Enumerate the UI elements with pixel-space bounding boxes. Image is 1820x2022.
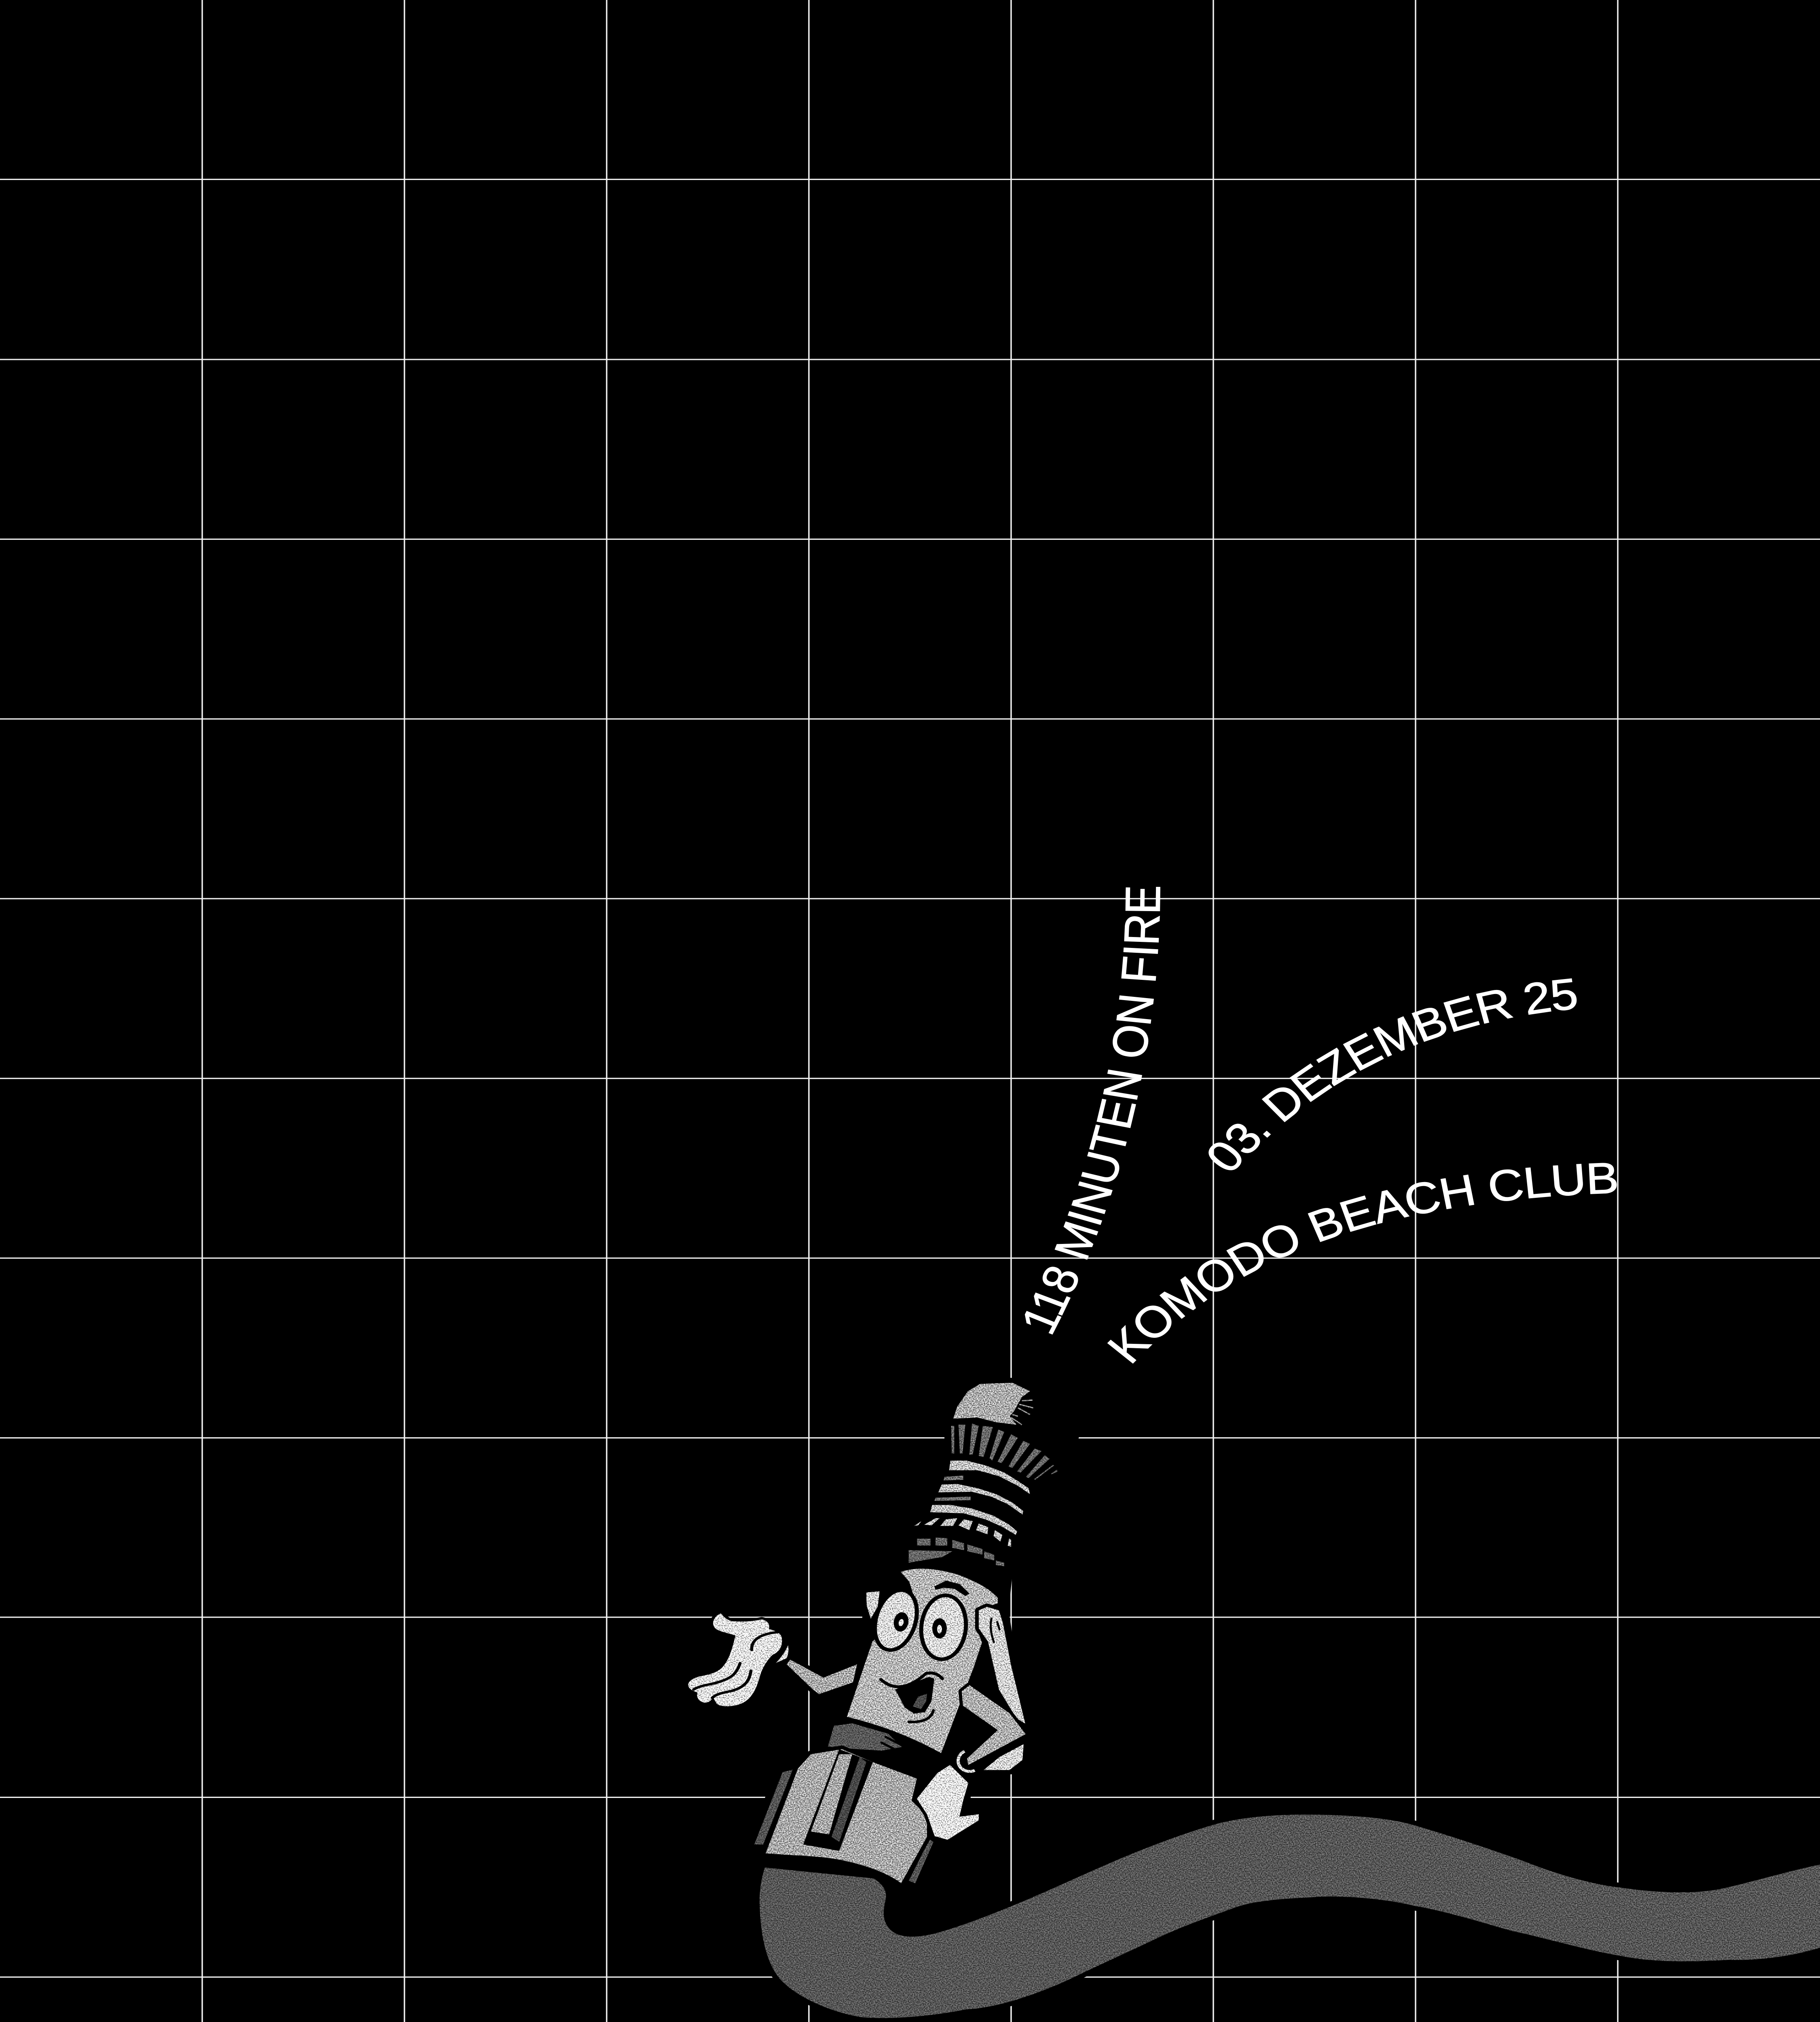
neck bands [930,1461,1030,1535]
right arm on hip [962,1685,1026,1765]
tongue [913,1694,927,1709]
dome highlight [953,1383,1030,1425]
neck band shadows [934,1476,971,1501]
smile line [881,1673,942,1687]
curved text: venue: KOMODO BEACH CLUB [1098,1154,1620,1372]
slot dark bar [832,1757,866,1842]
nozzle head dome [953,1383,1033,1425]
slot light bar [811,1754,852,1834]
ring [958,1751,975,1771]
nozzle ribs [951,1423,1058,1480]
left ear [866,1591,880,1619]
mascot: fire hose nozzle character [688,1378,1820,2018]
belt collar [828,1723,938,1778]
cuff [776,1645,789,1663]
slot frame [803,1749,873,1851]
right side strip [909,1839,933,1883]
left eye [871,1588,921,1652]
belt creases [882,1737,904,1751]
left side strip [754,1770,793,1844]
coupling body [766,1749,927,1883]
finger lines [694,1632,780,1698]
hose [760,1815,1820,2018]
collar upper studs [914,1518,1011,1547]
eyebrow [934,1580,969,1596]
lower lip [909,1710,933,1722]
right eye [921,1596,967,1659]
white glove on hip [917,1765,979,1840]
collar lower studs [909,1538,1004,1566]
black silhouette behind the nozzle [748,1378,1081,1889]
left hand [688,1614,789,1706]
curved text: date: 03. DEZEMBER 25 [1196,969,1581,1182]
right ear and raised side [979,1607,1025,1724]
left arm [787,1660,857,1694]
right hand [984,1744,1024,1770]
mouth [881,1673,942,1722]
body [847,1569,998,1753]
coupling [754,1749,933,1883]
dome hatch lines [1011,1400,1033,1425]
curved text: duration: 118 MINUTEN ON FIRE [1011,885,1171,1341]
